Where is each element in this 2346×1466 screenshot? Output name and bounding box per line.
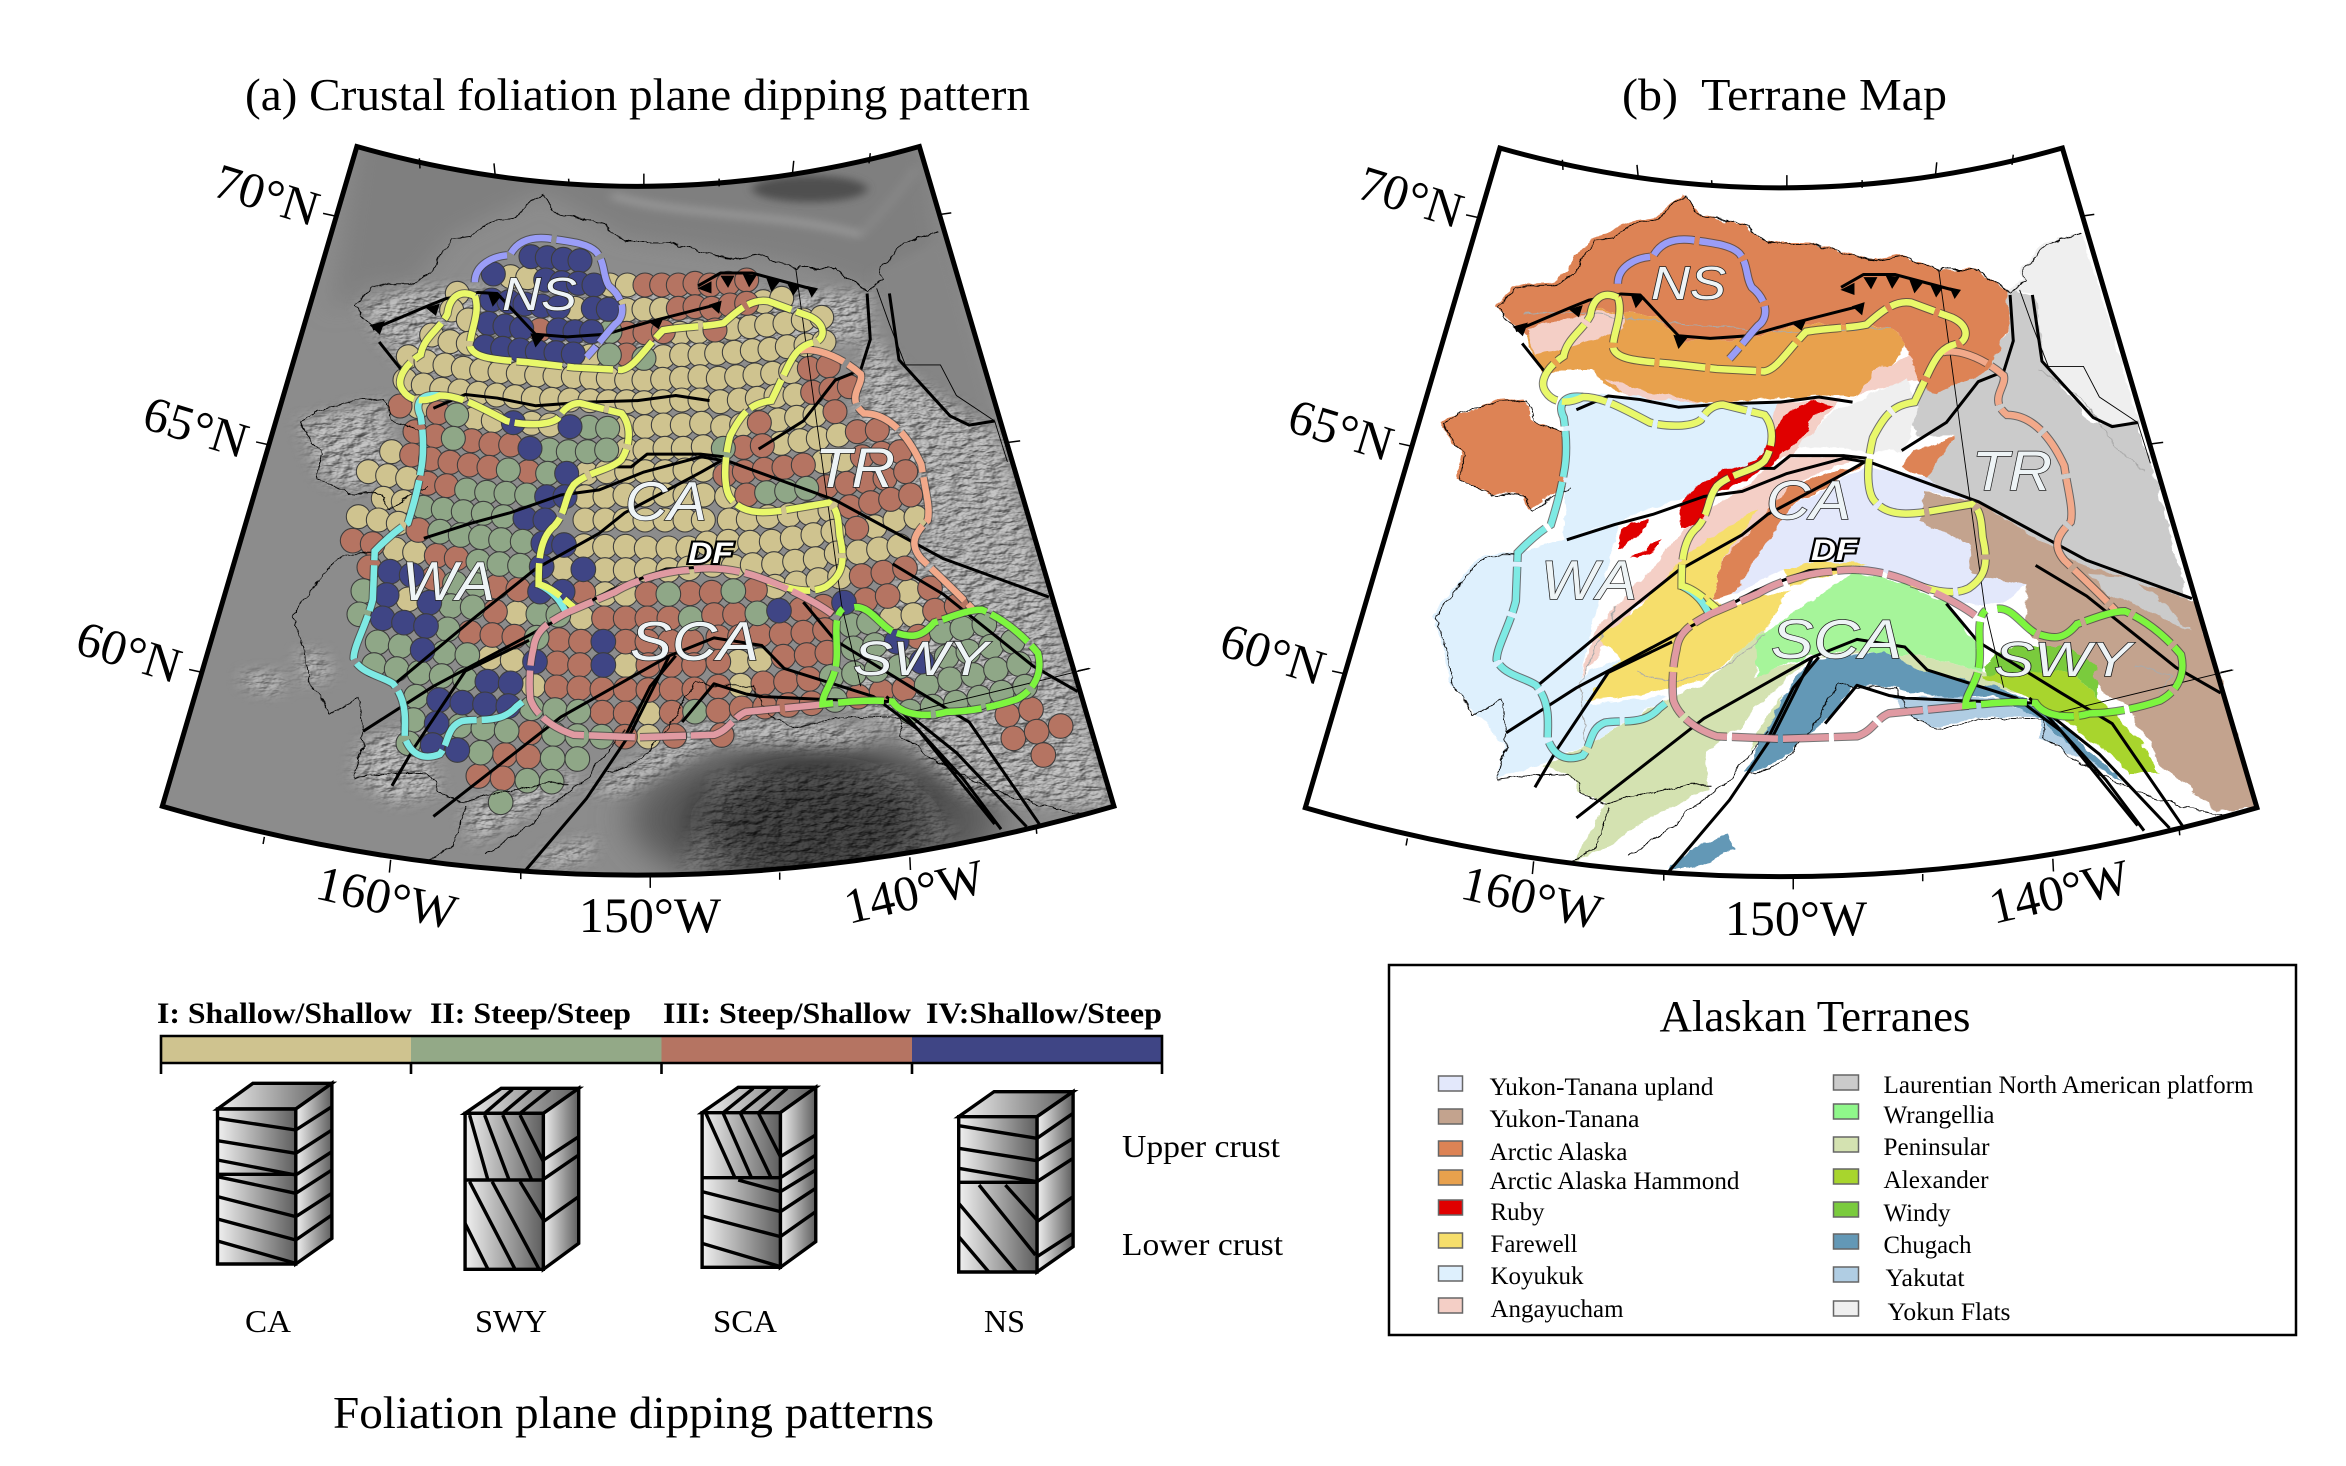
label TR: TR [1972,439,2052,502]
legend right column [1834,1072,2254,1326]
overlay repeated on panel b [1305,148,2257,889]
legend left column [1438,1074,1740,1323]
legend right column: Yokun Flats [1888,1299,2010,1326]
label CA: CA [1766,469,1851,531]
block labels [245,1128,1283,1339]
legend right column: Alexander [1884,1167,1989,1194]
axis labels panel b: 150°W [1725,890,1868,946]
block labels: SWY [475,1303,547,1339]
graticule and border lines [796,268,1090,712]
label SCA: SCA [630,610,759,672]
dots: northern quarter east [698,268,928,540]
terrane: Laurentian North American platform [1911,291,2198,635]
region boundaries [354,238,1039,757]
legend left column: Ruby [1490,1199,1545,1226]
colour bar labels: III: Steep/Shallow [663,997,911,1030]
legend left column: Yukon-Tanana [1490,1106,1640,1133]
panel b title: (b) Terrane Map [1622,70,1947,120]
legend left column: Arctic Alaska [1490,1139,1628,1166]
terrane: Koyukuk [1433,393,1777,778]
colour bar labels [157,997,1162,1030]
legend right column: Chugach [1884,1232,1972,1259]
terrane: Arctic Alaska [1439,194,2010,600]
axis labels panel a [70,152,991,943]
legend left column: Arctic Alaska Hammond [1490,1168,1740,1195]
coastlines [293,194,1084,862]
terrane: Yokun Flats central [1797,380,1918,452]
legend left column: Angayucham [1490,1296,1624,1323]
axis labels panel b [1214,154,2136,946]
label TR: TR [815,436,895,499]
axis labels panel b: 65°N [1282,387,1400,472]
colour bar [161,1036,1162,1074]
legend right column: Wrangellia [1884,1102,1994,1129]
region labels panel b [1541,257,2135,687]
axis labels panel a: 140°W [839,848,991,935]
label DF: DF [1811,534,1858,567]
colour bar labels: I: Shallow/Shallow [157,997,412,1030]
dots: southern quarter west [340,518,707,815]
terrane: Wrangellia [1755,574,1982,676]
terrane: Farewell [1586,508,1867,702]
terrane: Arctic Alaska Hammond [1526,309,1908,403]
terrane: Ruby [1618,401,1834,559]
axis labels panel a: 160°W [311,854,463,941]
legend right column: Yakutat [1886,1265,1965,1292]
block labels: NS [984,1303,1025,1339]
map overlay: frame, coast, faults, region boundaries [162,147,1114,888]
legend left column: Farewell [1490,1231,1578,1258]
axis labels panel b: 70°N [1352,154,1470,239]
legend title: Alaskan Terranes [1660,992,1970,1041]
legend left column: Yukon-Tanana upland [1490,1074,1714,1101]
terrane: Windy [1982,646,2096,697]
bottom caption: Foliation plane dipping patterns [333,1388,934,1438]
label DF: DF [688,537,734,570]
block labels: Upper crust [1122,1128,1280,1164]
panel a title: (a) Crustal foliation plane dipping pattern [245,70,1030,120]
block labels: CA [245,1303,291,1339]
block SCA [702,1087,816,1267]
legend right column: Windy [1884,1200,1951,1227]
legend panel [1389,965,2296,1335]
terrane: Yukon-Tanana upland [1733,467,2026,605]
colour bar labels: II: Steep/Steep [430,997,631,1030]
terrane: Peninsular [1545,630,2033,862]
panel a: hillshade map background [166,150,1111,873]
legend right column: Peninsular [1884,1134,1990,1161]
faults [363,273,1078,870]
block labels: SCA [713,1303,777,1339]
label NS: NS [1651,257,1726,309]
legend right column: Laurentian North American platform [1884,1072,2254,1099]
axis labels panel a: 150°W [579,887,722,943]
terrane: Angayucham [1526,311,1918,676]
terrane: Laurentian sliver [2090,574,2192,630]
label SWY: SWY [1994,634,2135,687]
dots: northern quarter west [346,245,715,535]
terrane: Yukon-Tanana [1921,492,2256,811]
foliation block diagrams [218,1083,1073,1272]
terrane: Chugach [1669,651,2122,870]
thrust teeth [370,274,818,348]
axis labels panel b: 160°W [1456,854,1608,941]
axis labels panel a: 70°N [208,152,326,237]
axis labels panel a: 65°N [137,384,255,469]
map frame and ticks [162,147,1114,888]
terrane: Yokun Flats north [2007,232,2138,426]
label SCA: SCA [1771,608,1902,670]
axis labels panel b: 60°N [1214,611,1332,696]
dots: southern quarter east [695,519,1073,767]
axis labels panel b: 140°W [1984,848,2136,935]
legend left column: Koyukuk [1490,1263,1584,1290]
terrane: Yakutat [1892,697,2116,778]
axis labels panel a: 60°N [70,609,188,694]
dot grid: foliation pattern classes [340,245,1073,815]
panel b: terrane polygons [1433,194,2256,870]
block SWY [465,1088,579,1269]
label CA: CA [625,470,707,532]
block CA [218,1083,332,1264]
thin internal boundaries [1526,312,2173,748]
colour bar labels: IV:Shallow/Steep [926,997,1162,1030]
block NS [959,1092,1073,1272]
label SWY: SWY [853,633,992,686]
block labels: Lower crust [1122,1226,1283,1262]
label WA: WA [1541,549,1637,611]
label NS: NS [502,268,577,320]
terrane: Alexander [1982,671,2160,773]
label WA: WA [402,550,495,612]
region labels panel a [402,268,992,686]
